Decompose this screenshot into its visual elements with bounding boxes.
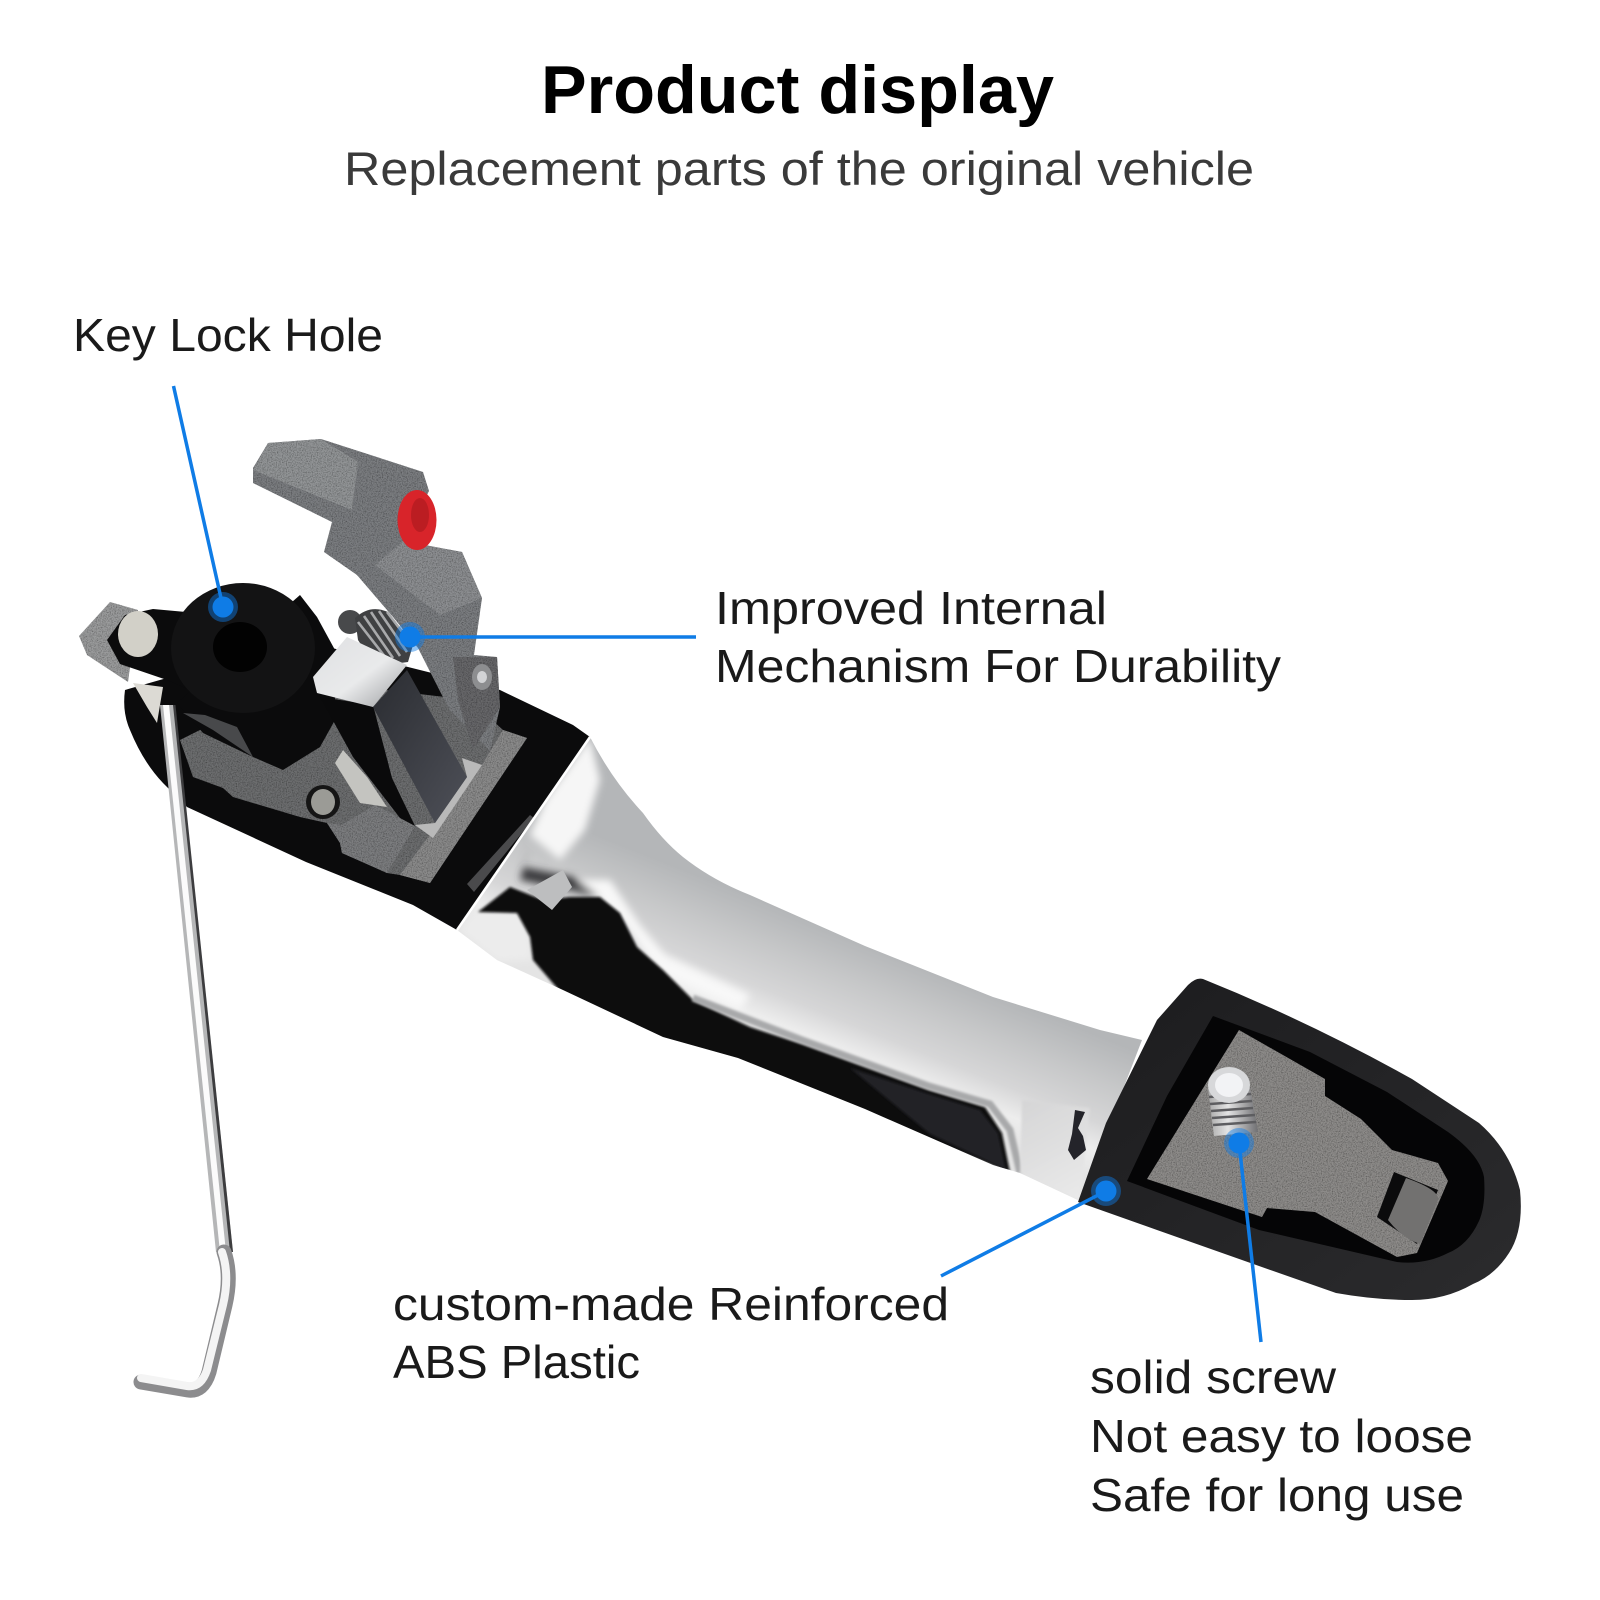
- chrome handle body: [458, 738, 1142, 1200]
- pivot pin: [472, 664, 492, 690]
- callout: internal mechanism: Improved Internal: [715, 582, 1107, 634]
- metal plate: [1147, 1030, 1448, 1257]
- small screw: [306, 785, 340, 819]
- hinge roller: [1377, 1172, 1438, 1244]
- white band along reflection: [693, 998, 1020, 1173]
- chrome lever cap: [313, 637, 407, 707]
- seam strips: [467, 815, 534, 892]
- chrome joint highlights: [515, 738, 748, 1006]
- callout: solid screw: [1090, 1128, 1473, 1521]
- threaded screw: [1208, 1067, 1258, 1136]
- lower cast block: [327, 805, 415, 873]
- callout: solid screw: Safe for long use: [1090, 1469, 1464, 1521]
- die-cast base: [180, 680, 527, 883]
- white clip: [133, 683, 163, 723]
- seam white line: [457, 737, 590, 930]
- black arm: [107, 609, 197, 690]
- knurl marks: [1068, 1110, 1086, 1160]
- upper grey lever: [253, 439, 500, 751]
- white slide piece: [335, 750, 387, 807]
- callout: solid screw: Not easy to loose: [1090, 1410, 1473, 1462]
- light tab: [527, 870, 572, 910]
- cap recess: [1127, 1016, 1484, 1263]
- chrome end section: [1019, 1103, 1088, 1174]
- callout: ABS plastic: ABS Plastic: [393, 1336, 640, 1388]
- callout: ABS plastic: custom-made Reinforced: [393, 1278, 949, 1330]
- black base plate: [124, 640, 590, 930]
- callout: internal mechanism: Mechanism For Durability: [715, 640, 1281, 692]
- product: door handle: [79, 439, 1521, 1390]
- callout: key lock hole: [73, 309, 383, 622]
- red plug: [398, 490, 436, 550]
- title: Product display: [541, 52, 1054, 128]
- end cap: [1078, 979, 1521, 1300]
- off-white knob: [118, 611, 158, 657]
- rod: [141, 705, 233, 1390]
- callout: ABS plastic: [393, 1176, 1121, 1388]
- dark paddle: [373, 670, 467, 823]
- callout: internal mechanism: [395, 582, 1281, 692]
- lock cylinder: [171, 583, 335, 770]
- subtitle: Replacement parts of the original vehicle: [344, 142, 1254, 195]
- dark end of reflection: [850, 1068, 1006, 1170]
- light tray: [415, 758, 482, 838]
- spring: [338, 609, 413, 663]
- callout: solid screw: solid screw: [1090, 1351, 1337, 1403]
- base right frame: [400, 730, 527, 883]
- callout: key lock hole: Key Lock Hole: [73, 309, 383, 361]
- left grey arm: [79, 602, 138, 682]
- black reflection: [478, 887, 1010, 1172]
- black lever body: [320, 697, 415, 826]
